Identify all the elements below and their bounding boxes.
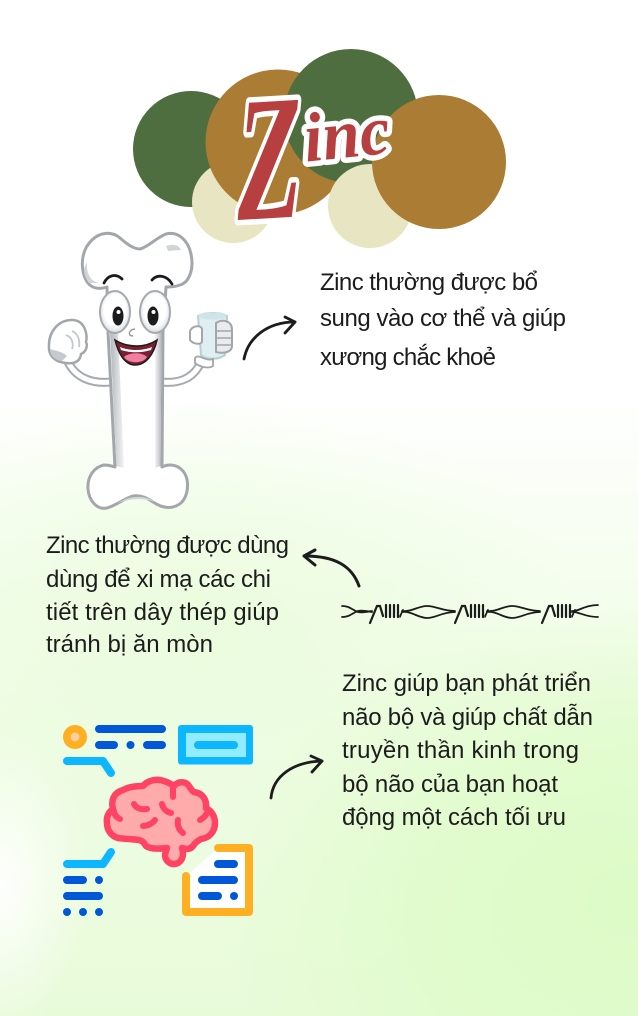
glass [198,313,227,359]
arrow: brain to text [271,756,322,798]
hand with glass [216,321,232,353]
title: inc [300,92,393,178]
text: galvanised wire: Zinc thường được dùng [46,532,289,559]
text: galvanised wire: tránh bị ăn mòn [46,631,213,658]
text: bone benefit: sung vào cơ thể và giúp [320,305,566,332]
title: Z [234,57,304,259]
left arm [68,362,111,382]
orange badge [63,725,87,749]
text: brain benefit: não bộ và giúp chất dẫn [342,704,593,731]
title [234,57,393,259]
nose [129,329,135,336]
brain [107,780,215,864]
text: brain benefit: động một cách tối ưu [342,804,566,831]
text: brain benefit: truyền thần kinh trong [342,737,579,764]
text: galvanised wire: tiết trên dây thép giúp [46,599,279,626]
bottom cyan connector [67,852,111,864]
mouth [115,340,157,365]
top cyan connector [67,761,111,773]
document [186,848,249,912]
icon: barbed wire [342,605,598,623]
text: bone benefit [320,269,566,371]
text: brain benefit [342,670,593,831]
eye left [100,291,130,333]
right arm [161,362,201,382]
bottom left blue lines [63,876,103,916]
top left blue lines [99,729,162,749]
arrow: wire to text [304,550,359,586]
text: bone benefit: xương chắc khoẻ [320,344,496,371]
text: brain benefit: bộ não của bạn hoạt [342,771,558,798]
brain folds [114,786,207,833]
icon: brain infographic [63,725,253,916]
bone shading [110,332,124,468]
text: galvanised wire [46,532,289,658]
cyan card [178,725,253,764]
fist [49,320,87,363]
text: brain benefit: Zinc giúp bạn phát triển [342,670,591,697]
document lines [202,864,238,900]
arrow: bone to text [244,317,295,359]
bone body [82,233,192,508]
eye right [140,291,170,333]
title circles [133,49,506,248]
icon: bone mascot [49,233,232,508]
brows [104,276,172,284]
text: galvanised wire: dùng để xi mạ các chi [46,566,271,593]
text: bone benefit: Zinc thường được bổ [320,269,538,296]
